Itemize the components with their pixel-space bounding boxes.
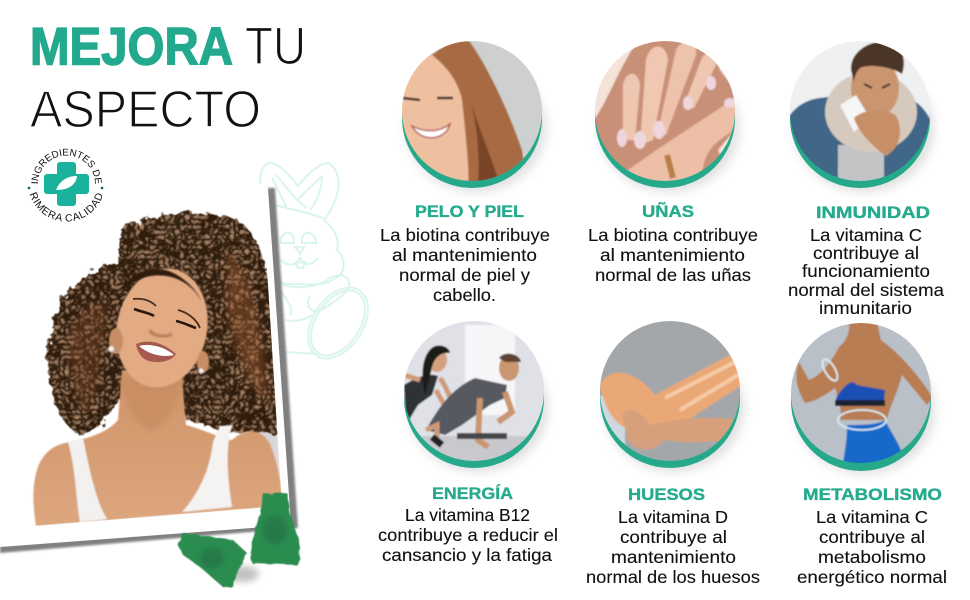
panel: unas: [588, 40, 758, 285]
smile: [136, 342, 176, 362]
panel: pelo y piel: [380, 40, 550, 305]
text: huesos: La vitamina D: [618, 507, 728, 527]
text: metabolismo: contribuye al: [819, 527, 925, 547]
title word: ASPECTO: ASPECTO: [30, 81, 261, 139]
bunny watermark: [260, 163, 380, 369]
text: inmunidad: funcionamiento: [802, 261, 930, 281]
badge leaf: [56, 176, 77, 190]
text: huesos: [586, 507, 760, 587]
text: unas: [588, 225, 758, 285]
text: metabolismo: energético normal: [797, 567, 947, 587]
text: inmunidad: normal del sistema: [788, 280, 944, 300]
text: huesos: normal de los huesos: [586, 567, 760, 587]
text: huesos: mantenimiento: [611, 547, 736, 567]
heading: pelo y piel: PELO Y PIEL: [415, 203, 524, 221]
text: inmunidad: [788, 225, 944, 318]
gummy bunny lying: [178, 533, 247, 587]
text: pelo y piel: al mantenimiento: [392, 245, 537, 265]
body and chest: [33, 260, 282, 526]
photo: hands: [593, 40, 739, 192]
text: unas: La biotina contribuye: [588, 225, 758, 245]
badge top text: INGREDIENTES DE: [31, 148, 102, 184]
photo: elbow: [598, 320, 744, 472]
text: inmunidad: La vitamina C: [810, 225, 922, 245]
nose: [150, 330, 172, 336]
text: huesos: contribuye al: [620, 527, 727, 547]
text: inmunidad: inmunitario: [819, 298, 912, 318]
heading: metabolismo: METABOLISMO: [803, 486, 942, 504]
eyes: [134, 309, 196, 328]
face: [116, 268, 209, 388]
text: metabolismo: metabolismo: [818, 547, 926, 567]
text: pelo y piel: La biotina contribuye: [380, 225, 550, 245]
text: metabolismo: [797, 507, 947, 587]
title word: TU: TU: [245, 17, 306, 76]
photo: people exercising: [402, 320, 548, 472]
photo contents: [33, 213, 282, 526]
badge bottom text: RIMERA CALIDAD: [30, 192, 102, 222]
text: energia: [378, 505, 558, 565]
photo card: smiling woman: [0, 188, 298, 553]
photo: woman with hair: [400, 40, 546, 192]
heading: inmunidad: INMUNIDAD: [816, 204, 930, 222]
text: energia: La vitamina B12: [405, 505, 530, 525]
panel: energia: [378, 320, 558, 565]
gummy bunny standing: [250, 492, 300, 565]
gummies: [178, 492, 300, 587]
panel: metabolismo: [789, 322, 947, 587]
text: pelo y piel: cabello.: [433, 285, 496, 305]
title: [30, 17, 306, 139]
text: energia: contribuye a reducir el: [378, 525, 558, 545]
text: pelo y piel: normal de piel y: [399, 265, 530, 285]
panel: huesos: [586, 320, 760, 587]
tank top: [68, 438, 107, 522]
text: unas: normal de las uñas: [595, 265, 751, 285]
panel: inmunidad: [788, 40, 944, 318]
card shadow: [0, 188, 298, 553]
text: pelo y piel: [380, 225, 550, 305]
photo: sick man: [788, 40, 934, 192]
title word: MEJORA: MEJORA: [30, 18, 233, 76]
badge: ingredientes de primera calidad: [28, 148, 104, 222]
hair: [47, 213, 278, 434]
text: inmunidad: contribuye al: [813, 243, 919, 263]
gummy shadow: [227, 566, 259, 582]
badge cross: [44, 162, 89, 206]
heading: unas: UÑAS: [642, 201, 694, 221]
heading: huesos: HUESOS: [628, 486, 705, 504]
white card: [0, 188, 291, 547]
heading: energia: ENERGÍA: [432, 484, 513, 503]
copper highlights: [226, 250, 268, 400]
text: unas: al mantenimiento: [600, 245, 745, 265]
text: energia: cansancio y la fatiga: [382, 545, 552, 565]
photo: toned back: [789, 322, 935, 474]
text: metabolismo: La vitamina C: [816, 507, 928, 527]
